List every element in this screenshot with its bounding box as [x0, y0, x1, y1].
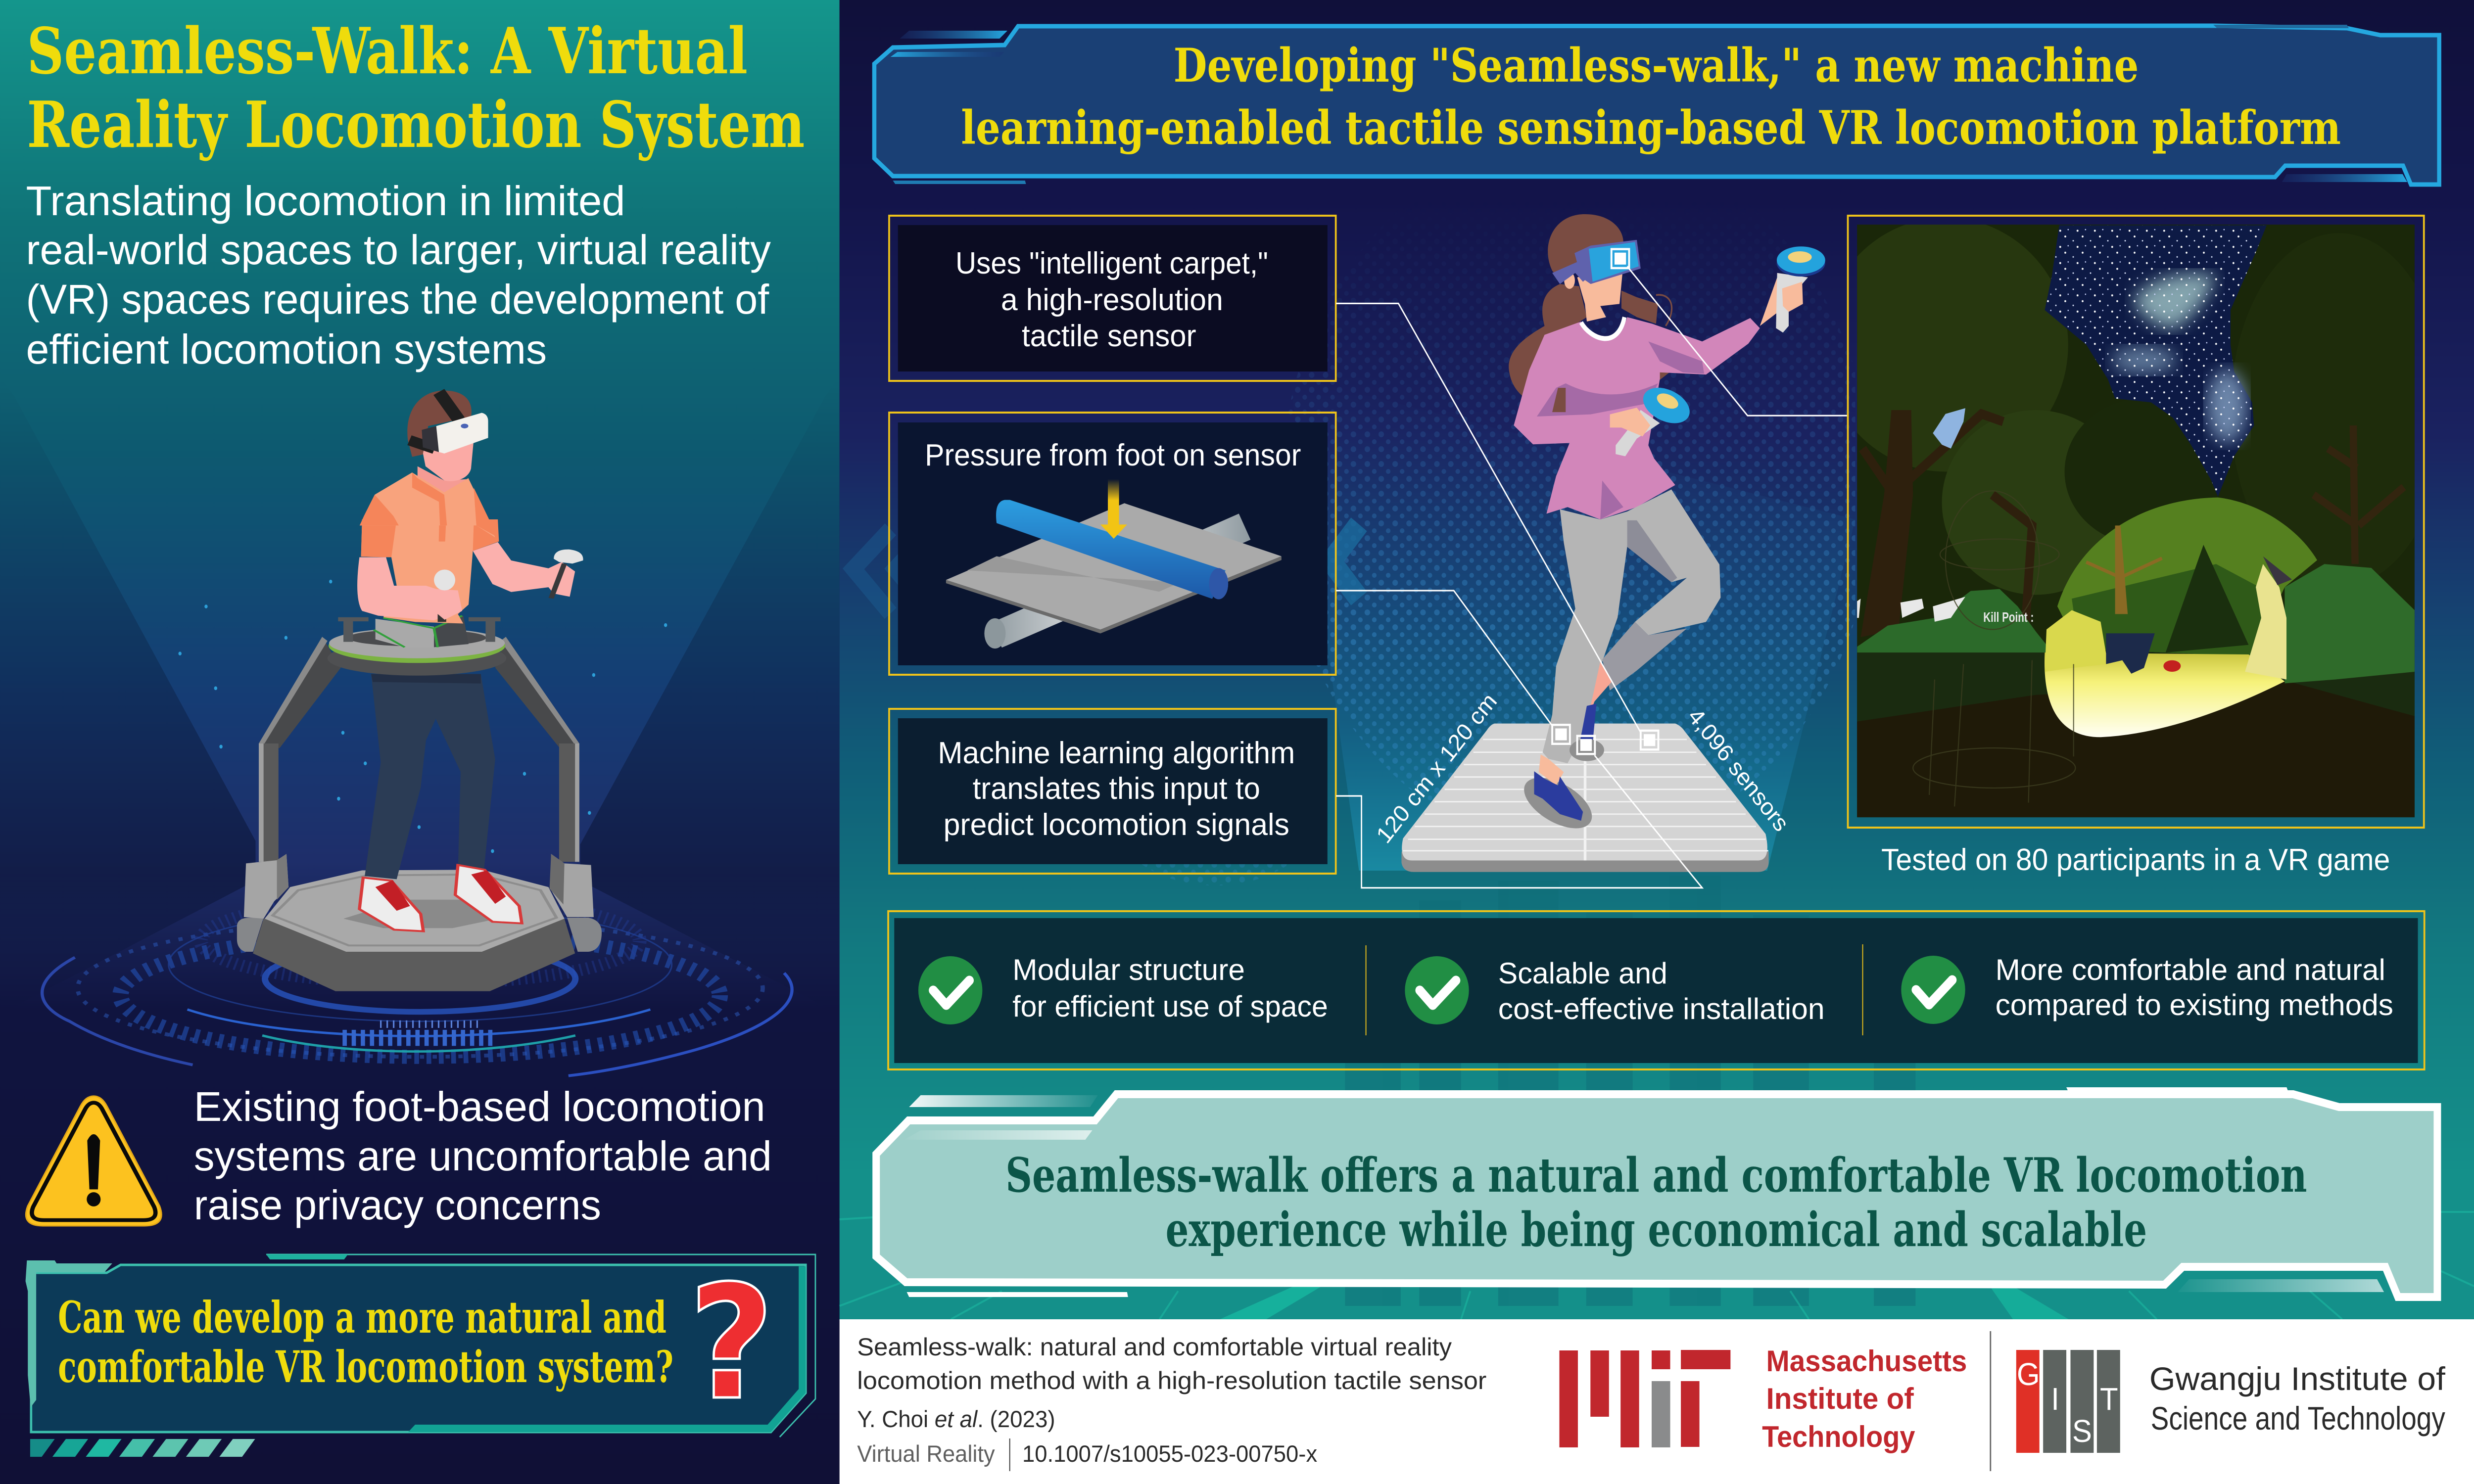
conclusion text — [1005, 1147, 2307, 1257]
text block: introduction: Translating locomotion in limited — [26, 178, 625, 225]
question text: comfortable VR locomotion system? — [58, 1342, 673, 1393]
text block: existing systems problem — [194, 1084, 772, 1229]
logo: GIST — [2016, 1350, 2445, 1453]
carpet — [1401, 724, 1769, 872]
logo: GIST: T — [2100, 1382, 2118, 1417]
logo: GIST: S — [2072, 1414, 2092, 1449]
citation — [857, 1334, 1486, 1471]
label: carpet size: 120 cm x 120 cm — [1371, 688, 1502, 848]
text block: introduction: (VR) spaces requires the development of — [26, 277, 769, 323]
benefit 1: for efficient use of space — [1012, 990, 1328, 1023]
title — [27, 14, 805, 162]
logo: MIT — [1559, 1345, 1967, 1453]
text block: introduction: efficient locomotion systems — [26, 326, 547, 373]
heading text: Developing "Seamless-walk," a new machine — [1174, 38, 2139, 93]
icon: warning triangle — [26, 1096, 161, 1226]
citation: 10.1007/s10055-023-00750-x — [1022, 1441, 1317, 1467]
panel: intelligent carpet: Uses "intelligent carpet," — [955, 246, 1268, 280]
logo: MIT: Institute of — [1766, 1382, 1914, 1415]
diagram: sensor cross-section — [946, 479, 1282, 649]
title: Seamless-Walk: A Virtual — [27, 14, 748, 89]
title: Reality Locomotion System — [27, 88, 805, 162]
logo: GIST: I — [2051, 1382, 2059, 1417]
icon: red question mark: ? — [689, 1252, 774, 1435]
panel: machine learning: predict locomotion signals — [944, 807, 1289, 841]
panel: right background — [840, 0, 2474, 1321]
question text — [58, 1292, 673, 1393]
panel: VR game screenshot — [1823, 216, 2447, 828]
sensor markers — [1552, 249, 1659, 754]
illustration: man on locomotion platform — [237, 391, 602, 991]
logo: GIST: Science and Technology — [2151, 1400, 2445, 1437]
logo: MIT: Massachusetts — [1766, 1345, 1967, 1378]
heading banner — [874, 25, 2439, 185]
panel: research question — [26, 1252, 815, 1437]
benefit 1 — [918, 953, 1328, 1024]
benefit 2: cost-effective installation — [1498, 992, 1825, 1025]
benefit 3 — [1901, 953, 2393, 1024]
benefit 3: compared to existing methods — [1996, 988, 2393, 1021]
panel: intelligent carpet: tactile sensor — [1022, 319, 1196, 353]
text block: existing systems problem: systems are uncomfortable and — [194, 1133, 772, 1180]
panel: conclusion — [876, 1087, 2437, 1297]
text block: introduction: real-world spaces to larger, virtual reality — [26, 227, 771, 274]
text block: introduction — [26, 178, 771, 373]
text block: existing systems problem: raise privacy concerns — [194, 1182, 601, 1229]
panel: foot pressure — [889, 413, 1336, 675]
panel: VR game screenshot: Kill Point : — [1983, 609, 2034, 625]
panel: benefits — [888, 911, 2425, 1069]
benefit 2: Scalable and — [1498, 957, 1667, 990]
panel: machine learning: translates this input to — [973, 771, 1260, 805]
heading text — [961, 38, 2341, 155]
panel: foot pressure: Pressure from foot on sensor — [925, 438, 1301, 472]
icon: hazard stripe — [30, 1439, 255, 1457]
conclusion text: experience while being economical and scalable — [1166, 1202, 2147, 1257]
citation: locomotion method with a high-resolution tactile sensor — [857, 1367, 1486, 1394]
heading text: learning-enabled tactile sensing-based VR locomotion platform — [961, 100, 2341, 155]
illustration: woman on intelligent carpet — [1336, 214, 1848, 888]
icon: holographic floor rings — [42, 898, 792, 1076]
benefit 1: Modular structure — [1012, 953, 1245, 986]
text block: existing systems problem: Existing foot-based locomotion — [194, 1084, 765, 1130]
benefit 3: More comfortable and natural — [1996, 953, 2385, 986]
logo: GIST: Gwangju Institute of — [2149, 1360, 2445, 1397]
icon: spotlight particles — [178, 580, 667, 853]
label: sensor count: 4,096 sensors — [1683, 703, 1794, 836]
connector lines — [1336, 266, 1848, 888]
citation: Seamless-walk: natural and comfortable virtual reality — [857, 1334, 1452, 1361]
caption: game test: Tested on 80 participants in a VR game — [1881, 842, 2390, 877]
woman — [1509, 214, 1825, 839]
lower body and platform — [237, 519, 602, 991]
logo: GIST: G — [2017, 1357, 2040, 1392]
panel: intelligent carpet: a high-resolution — [1001, 282, 1223, 317]
citation: Y. Choi et al. (2023) — [857, 1406, 1055, 1432]
head and torso — [360, 391, 498, 537]
question text: Can we develop a more natural and — [58, 1292, 666, 1344]
panel: machine learning: Machine learning algorithm — [938, 736, 1295, 770]
benefit 2 — [1405, 956, 1825, 1025]
citation: Virtual Reality — [857, 1441, 995, 1467]
panel: machine learning — [889, 709, 1336, 874]
panel: left background — [0, 0, 840, 1484]
logo: MIT: Technology — [1762, 1420, 1915, 1453]
panel: intelligent carpet — [889, 216, 1336, 381]
panel: footer — [840, 1319, 2474, 1484]
